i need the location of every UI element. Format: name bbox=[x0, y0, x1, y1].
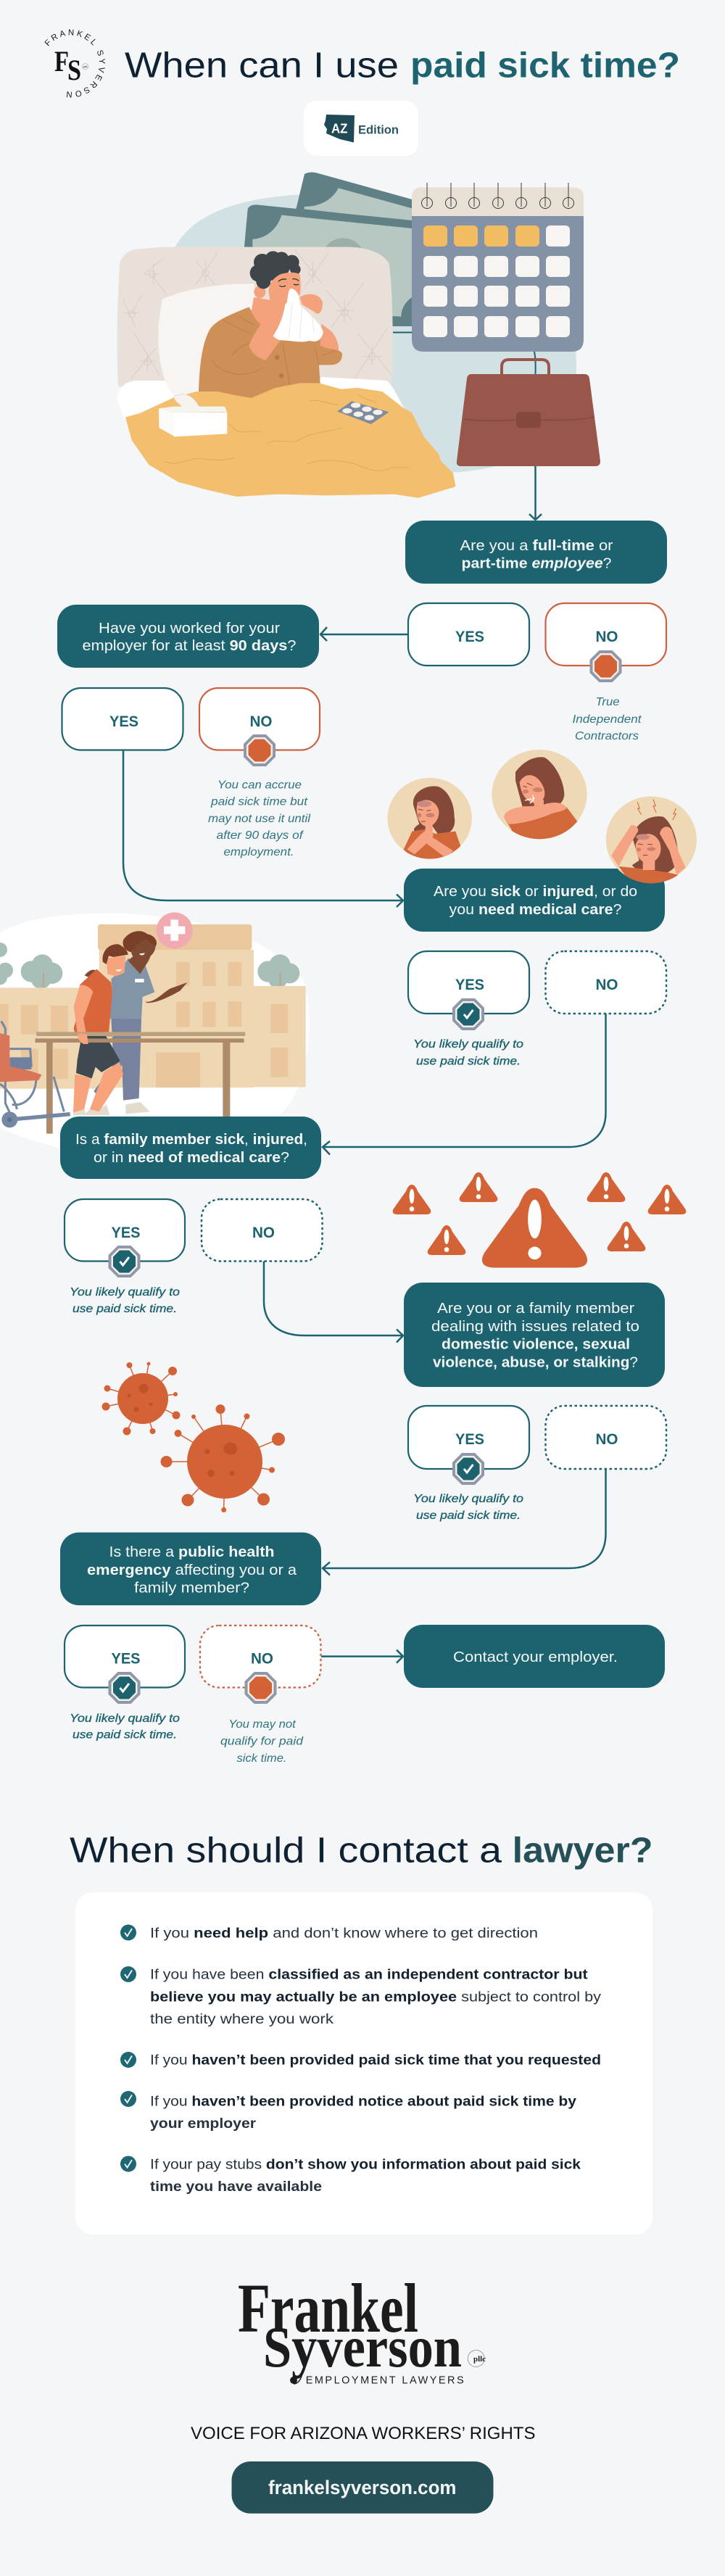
title: paid sick time? bbox=[410, 46, 680, 86]
flow box: domestic violence: violence, abuse, or stalking? bbox=[433, 1354, 638, 1370]
note: accrue sick time: may not use it until bbox=[208, 813, 310, 825]
flow box: sick or injured: you need medical care ? bbox=[450, 901, 622, 918]
note: accrue sick time: paid sick time but bbox=[210, 796, 308, 808]
flow box: 90 days: Have you worked for your bbox=[99, 620, 280, 637]
answer: YES with check: YES bbox=[455, 1431, 484, 1448]
button: website: frankelsyverson.com bbox=[268, 2477, 457, 2498]
answer: YES with check: YES bbox=[455, 977, 484, 993]
answer: NO with stop icon: NO bbox=[249, 713, 273, 730]
answer: NO dashed with stop icon bbox=[200, 1625, 320, 1704]
badge: AZ edition bbox=[304, 101, 418, 156]
illustration: three sick women in circles bbox=[387, 750, 697, 885]
arrow: no to contact employer bbox=[321, 1650, 403, 1663]
arrow: yes to 90 days bbox=[320, 627, 408, 641]
flow box: domestic violence: dealing with issues related to bbox=[431, 1318, 639, 1335]
flow box: contact your employer: Contact your employer. bbox=[453, 1649, 618, 1665]
note: accrue sick time: You can accrue bbox=[218, 779, 302, 792]
item: classified as independent contractor: the entity where you work bbox=[150, 2011, 334, 2027]
icon: virus large bbox=[161, 1404, 285, 1512]
arrow: no to public health emergency bbox=[323, 1469, 606, 1575]
answer: YES with check bbox=[408, 1406, 529, 1485]
item: not provided notice bbox=[120, 2091, 576, 2132]
flow box: contact your employer bbox=[404, 1625, 665, 1688]
flow box: family member bbox=[60, 1117, 321, 1179]
hero illustration: sick man in bed with money, calendar and briefcase bbox=[117, 173, 600, 497]
white backdrop bbox=[0, 914, 310, 1151]
logo: Frankel Syverson employment lawyers: pllc bbox=[473, 2355, 486, 2364]
arrow: start to first question bbox=[529, 466, 542, 520]
flow box: 90 days: employer for at least 90 days? bbox=[83, 637, 297, 654]
panel: lawyer checklist bbox=[75, 1892, 652, 2235]
note: likely qualify bbox=[70, 1286, 180, 1315]
badge: AZ edition: AZ bbox=[331, 122, 348, 136]
note: true independent contractors: True bbox=[596, 696, 620, 708]
logo: Frankel Syverson employment lawyers bbox=[238, 2269, 486, 2386]
arrow: no to violence question bbox=[264, 1262, 403, 1343]
note: likely qualify: You likely qualify to bbox=[413, 1038, 523, 1051]
answer: NO dashed bbox=[545, 1406, 666, 1469]
flow box: family member: or in need of medical care ? bbox=[94, 1149, 289, 1166]
building bbox=[0, 950, 306, 1089]
note: true independent contractors: Contractors bbox=[575, 730, 639, 742]
icon: virus small bbox=[102, 1362, 180, 1436]
logo: Frankel Syverson employment lawyers: EMPLOYMENT LAWYERS bbox=[306, 2374, 464, 2386]
badge: AZ edition: Edition bbox=[358, 123, 399, 136]
answer: YES: YES bbox=[109, 713, 138, 730]
note: likely qualify: use paid sick time. bbox=[72, 1728, 177, 1742]
flow box: public health emergency bbox=[60, 1533, 321, 1605]
logo: Frankel Syverson employment lawyers: Syverson bbox=[263, 2316, 462, 2380]
note: likely qualify: You likely qualify to bbox=[70, 1712, 180, 1725]
note: true independent contractors: Independent bbox=[573, 713, 642, 726]
flow box: domestic violence: domestic violence, sexual bbox=[442, 1335, 630, 1353]
note: likely qualify: use paid sick time. bbox=[416, 1509, 521, 1522]
answer: NO dashed bbox=[202, 1199, 322, 1262]
answer: YES: YES bbox=[455, 629, 484, 645]
answer: NO dashed: NO bbox=[596, 1431, 618, 1448]
flow box: domestic violence: Are you or a family member bbox=[437, 1300, 634, 1317]
arrow: yes to sick or injured bbox=[123, 750, 403, 907]
note: likely qualify: use paid sick time. bbox=[416, 1056, 521, 1067]
answer: NO dashed: NO bbox=[596, 977, 618, 993]
icons: warning triangles bbox=[393, 1172, 686, 1267]
heading: when should I contact a lawyer bbox=[70, 1831, 653, 1871]
woman with headache bbox=[606, 796, 697, 885]
answer: YES with check: YES bbox=[112, 1225, 141, 1241]
answer: YES with check bbox=[65, 1625, 185, 1704]
patient bbox=[73, 944, 128, 1115]
flow box: family member: Is a family member sick, injured, bbox=[75, 1131, 307, 1148]
flow box: sick or injured bbox=[404, 869, 665, 932]
answer: NO dashed with stop icon: NO bbox=[251, 1651, 273, 1668]
note: likely qualify: You likely qualify to bbox=[413, 1493, 523, 1505]
flow box: public health emergency: emergency affecting you or a bbox=[87, 1562, 297, 1578]
flow box: full-time or part-time employee: part-time employee? bbox=[461, 555, 612, 571]
answer: YES with check bbox=[408, 951, 529, 1030]
flow box: full-time or part-time employee bbox=[405, 521, 667, 584]
note: accrue sick time bbox=[208, 779, 310, 858]
answer: NO with stop icon bbox=[199, 688, 320, 766]
answer: YES bbox=[408, 603, 529, 666]
arrow: no to family member bbox=[323, 1014, 606, 1154]
note: likely qualify bbox=[413, 1038, 523, 1067]
flow box: full-time or part-time employee: Are you a full-time or bbox=[460, 537, 613, 554]
title bbox=[125, 46, 680, 86]
item: classified as independent contractor: If you have been classified as an independent contractor but bbox=[150, 1967, 588, 1983]
heading: when should I contact a lawyer: When should I contact a bbox=[70, 1831, 502, 1871]
item: need help: If you need help and don’t know where to get direction bbox=[150, 1926, 538, 1942]
answer: NO dashed: NO bbox=[252, 1225, 275, 1241]
heading: when should I contact a lawyer: lawyer? bbox=[513, 1831, 653, 1871]
item: pay stubs: If your pay stubs don’t show you information about paid sick bbox=[150, 2157, 581, 2173]
tagline: VOICE FOR ARIZONA WORKERS’ RIGHTS bbox=[191, 2424, 535, 2443]
answer: NO with stop icon: NO bbox=[596, 629, 618, 645]
woman with sore throat bbox=[387, 778, 472, 861]
note: may not qualify: qualify for paid bbox=[220, 1736, 304, 1747]
note: accrue sick time: employment. bbox=[223, 846, 294, 858]
flow box: public health emergency: Is there a public health bbox=[109, 1544, 274, 1560]
note: accrue sick time: after 90 days of bbox=[216, 829, 304, 842]
item: pay stubs: time you have available bbox=[150, 2179, 322, 2195]
flow box: public health emergency: family member? bbox=[134, 1579, 249, 1596]
item: not provided notice: If you haven’t been provided notice about paid sick time by bbox=[150, 2093, 576, 2109]
icon: briefcase bbox=[457, 360, 600, 466]
note: may not qualify: sick time. bbox=[236, 1752, 287, 1765]
logo: circular monogram: FRANKEL SYVERSON bbox=[44, 29, 105, 98]
note: likely qualify: use paid sick time. bbox=[72, 1303, 177, 1315]
item: classified as independent contractor: believe you may actually be an employee subject to control by bbox=[150, 1989, 601, 2005]
flow box: 90 days bbox=[57, 605, 319, 668]
note: may not qualify: You may not bbox=[228, 1718, 296, 1731]
title: When can I use bbox=[125, 46, 399, 86]
answer: YES with check bbox=[65, 1199, 185, 1277]
button: website bbox=[232, 2461, 493, 2514]
note: likely qualify bbox=[413, 1493, 523, 1522]
logo: circular monogram: pllc bbox=[83, 65, 88, 68]
note: may not qualify bbox=[220, 1718, 304, 1765]
item: classified as independent contractor bbox=[120, 1966, 601, 2027]
answer: YES bbox=[62, 688, 183, 750]
logo: Frankel Syverson employment lawyers: Frankel bbox=[238, 2269, 418, 2347]
teal connector behind illustration bbox=[393, 332, 536, 392]
note: true independent contractors bbox=[573, 696, 642, 742]
nurse bbox=[85, 931, 187, 1115]
answer: NO with stop icon bbox=[545, 603, 666, 682]
illustration: hospital with nurse helping patient bbox=[0, 912, 310, 1151]
item: not provided notice: your employer bbox=[150, 2116, 256, 2132]
pale blue blob bbox=[175, 194, 576, 473]
note: likely qualify: You likely qualify to bbox=[70, 1286, 180, 1299]
parallel bars bbox=[35, 1032, 245, 1134]
flow box: domestic violence bbox=[404, 1283, 665, 1387]
icon: money bills bbox=[244, 173, 412, 326]
logo: circular monogram: F bbox=[54, 45, 69, 78]
answer: YES with check: YES bbox=[112, 1651, 141, 1668]
woman coughing bbox=[492, 750, 587, 841]
icon: hospital cross bbox=[157, 912, 193, 948]
icon: calendar bbox=[412, 183, 584, 352]
item: pay stubs bbox=[120, 2156, 581, 2195]
bed, man, blanket bbox=[117, 247, 455, 497]
flow box: sick or injured: Are you sick or injured, or do bbox=[434, 883, 637, 900]
item: not provided sick time: If you haven’t been provided paid sick time that you requested bbox=[150, 2052, 601, 2068]
note: likely qualify bbox=[70, 1712, 180, 1742]
wheelchair bbox=[0, 1021, 70, 1127]
logo: circular monogram: S bbox=[67, 54, 81, 86]
trees bbox=[0, 943, 299, 989]
answer: NO dashed bbox=[545, 951, 666, 1014]
